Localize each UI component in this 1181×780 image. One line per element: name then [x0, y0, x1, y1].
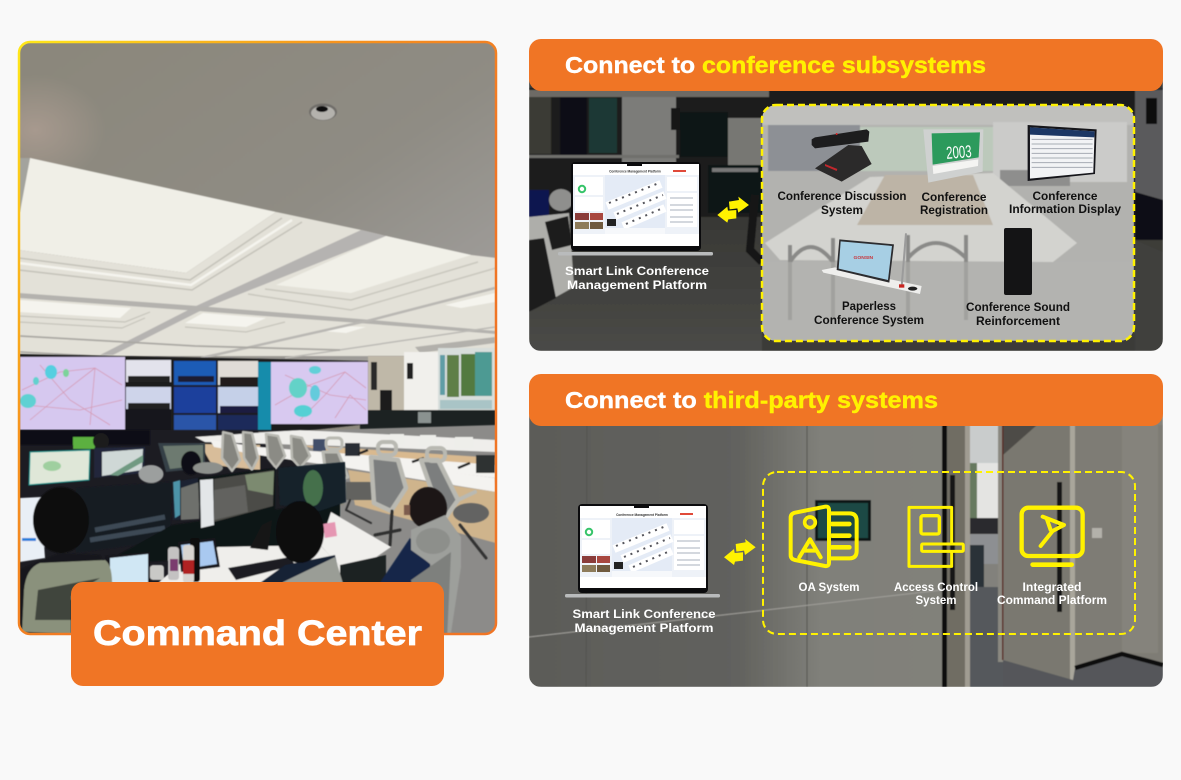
label: sound reinforcement: Reinforcement — [976, 314, 1060, 328]
label: conference discussion: Conference Discussion — [778, 189, 906, 203]
label: conference discussion: System — [821, 203, 863, 217]
label: integrated command platform: Integrated — [1022, 580, 1082, 594]
icon: speaker — [1004, 228, 1032, 295]
label: information display — [1009, 189, 1121, 216]
label: sound reinforcement — [966, 300, 1070, 328]
label: paperless: Paperless — [842, 299, 896, 313]
dashed box: subsystems — [762, 105, 1134, 341]
icon: information display — [1028, 125, 1097, 181]
photo: video wall — [19, 354, 368, 436]
label: registration: Registration — [920, 203, 988, 217]
label: sound reinforcement: Conference Sound — [966, 300, 1070, 314]
label: platform: Management Platform — [574, 621, 714, 635]
label: paperless: Conference System — [814, 313, 924, 327]
laptop: management platform — [565, 504, 720, 598]
label: integrated command platform: Command Platform — [997, 593, 1107, 607]
label: OA system: OA System — [798, 580, 860, 594]
icon: registration terminal: 2003 — [946, 141, 972, 163]
label: registration: Conference — [922, 190, 987, 204]
photo: wall and door — [529, 405, 1163, 687]
heading: conference subsystems — [529, 39, 1163, 91]
label: access control — [894, 580, 978, 607]
label: conference discussion — [778, 189, 906, 217]
label: information display: Information Display — [1009, 202, 1121, 216]
photo: desks and floor — [19, 425, 496, 640]
laptop: management platform: Conference Management Platform — [616, 513, 668, 517]
panel: third-party systems — [529, 405, 1163, 687]
laptop: management platform — [558, 162, 713, 256]
label: platform: Smart Link Conference — [565, 264, 709, 278]
label: platform — [572, 607, 716, 635]
icon: OA system — [791, 507, 857, 566]
photo: monitors and operator desk — [19, 430, 461, 640]
icon: registration terminal — [923, 129, 983, 183]
laptop: management platform: Conference Management Platform — [609, 170, 661, 174]
arrows: bidirectional link — [717, 197, 749, 223]
label: access control: System — [916, 593, 956, 607]
label: information display: Conference — [1032, 189, 1098, 203]
icon: conference discussion microphone — [812, 129, 872, 182]
people — [21, 552, 102, 629]
label: registration — [920, 190, 988, 217]
label: platform — [565, 264, 709, 292]
heading: third-party systems: Connect to third-party systems — [565, 387, 938, 413]
label: Command Center: Command Center — [93, 614, 422, 653]
label: paperless — [814, 299, 924, 327]
chair backs — [22, 560, 112, 634]
label: platform: Smart Link Conference — [572, 607, 716, 621]
icon: paperless terminal — [822, 233, 922, 294]
heading: conference subsystems: Connect to conference subsystems — [565, 52, 986, 78]
heading: third-party systems — [529, 374, 1163, 426]
label: platform: Management Platform — [567, 278, 707, 292]
icon: integrated command platform — [1022, 508, 1083, 565]
label: Command Center — [71, 582, 444, 686]
photo: ceiling — [20, 91, 495, 362]
arrows: bidirectional link — [724, 539, 756, 565]
label: access control: Access Control — [894, 580, 978, 594]
icon: paperless terminal: GONSIN — [853, 255, 874, 261]
dashed box: third-party — [763, 472, 1135, 634]
photo: back wall and windows — [360, 348, 496, 431]
photo: office chairs — [222, 432, 489, 558]
right edge — [1158, 88, 1163, 90]
photo: conference room background — [529, 70, 1163, 351]
panel: command center photo — [0, 42, 496, 640]
panel: conference subsystems — [529, 70, 1163, 351]
icon: access control — [909, 507, 963, 566]
label: integrated command platform — [997, 580, 1107, 607]
